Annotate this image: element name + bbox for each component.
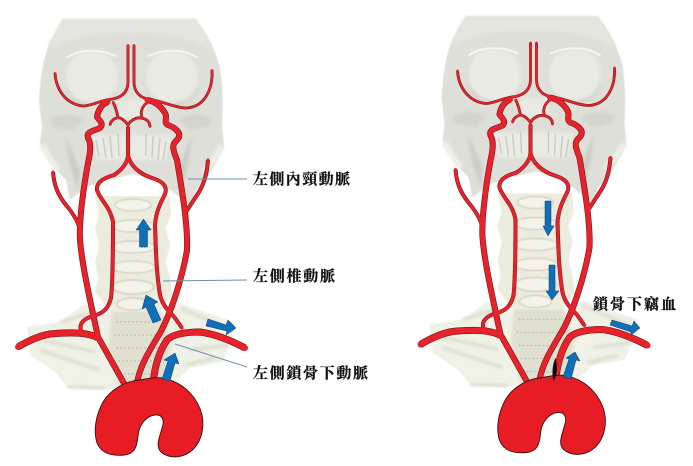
callout: left internal carotid artery: 左側內頸動脈	[253, 170, 350, 188]
shifted copy of bones, arteries and aorta	[420, 16, 648, 454]
callout: left vertebral artery: 左側椎動脈	[253, 267, 335, 285]
callout: left subclavian artery	[175, 344, 368, 382]
arrow: vertebral flow upward	[136, 219, 151, 247]
panel: normal left vertebral flow	[18, 19, 245, 457]
arrow: left subclavian flow from arch	[563, 352, 580, 379]
arrow: lower vertebral flow upward	[142, 295, 161, 323]
stenosis: black narrowing mark	[552, 358, 557, 381]
arrow: left subclavian flow from arch	[162, 353, 179, 381]
aortic arch	[95, 378, 203, 457]
panel: subclavian steal	[420, 16, 676, 454]
carotid, vertebral and subclavian arteries	[18, 45, 245, 385]
arrow: reversed vertebral flow lower	[546, 265, 559, 300]
label: subclavian steal: 鎖骨下竊血	[593, 295, 676, 313]
callout: left subclavian artery: 左側鎖骨下動脈	[253, 364, 368, 382]
arrow: subclavian flow outward	[610, 320, 640, 335]
arrow: reversed vertebral flow upper	[543, 201, 554, 236]
skull, cervical spine and shoulder bones	[27, 19, 235, 390]
arrow: subclavian flow outward	[206, 319, 236, 335]
